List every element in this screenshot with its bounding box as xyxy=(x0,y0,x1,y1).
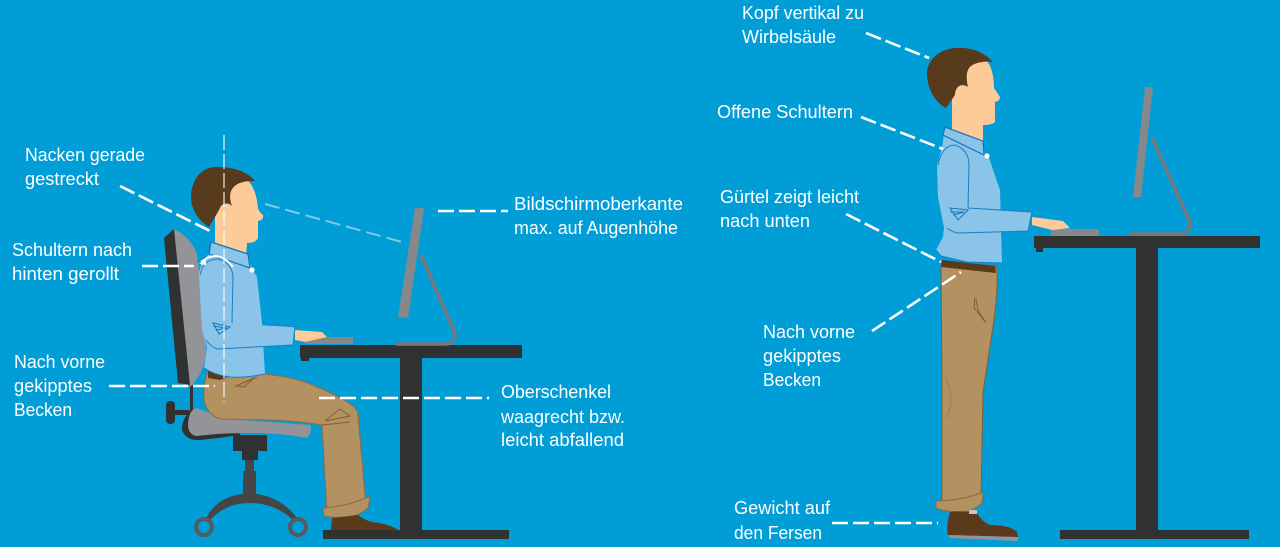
callout: Bildschirmoberkante: Bildschirmoberkante xyxy=(514,193,683,214)
callout: Nach vorne gekipptes Becken (seated): Nach vorne xyxy=(14,351,105,372)
callout: Gewicht auf den Fersen: den Fersen xyxy=(734,522,822,543)
callout: Bildschirmoberkante: max. auf Augenhöhe xyxy=(514,217,678,238)
monitor: seated xyxy=(396,208,455,344)
callout: Nacken gerade gestreckt xyxy=(25,144,214,233)
desk: seated xyxy=(300,345,522,539)
monitor: standing xyxy=(1130,87,1190,234)
callout: Offene Schultern xyxy=(717,101,943,149)
callout: Kopf vertikal zu Wirbelsäule: Kopf vertikal zu xyxy=(742,2,864,23)
callout: Gewicht auf den Fersen xyxy=(734,497,938,543)
callout: Schultern nach hinten gerollt xyxy=(12,239,194,284)
callout: Nach vorne gekipptes Becken (standing): Nach vorne xyxy=(763,321,855,342)
keyboard: seated xyxy=(305,337,353,344)
callout: Gürtel zeigt leicht nach unten xyxy=(720,186,941,262)
callout: Bildschirmoberkante xyxy=(438,193,683,238)
callout: Oberschenkel xyxy=(319,381,625,450)
callout: Nach vorne gekipptes Becken (standing) xyxy=(763,272,961,390)
callout: Offene Schultern: Offene Schultern xyxy=(717,101,853,122)
desk: standing xyxy=(1034,236,1260,539)
person: standing xyxy=(927,48,1070,541)
guide: eye line to screen top xyxy=(265,204,402,242)
callout: Nach vorne gekipptes Becken (seated) xyxy=(14,351,215,420)
callout: Gürtel zeigt leicht nach unten: Gürtel zeigt leicht xyxy=(720,186,859,207)
illustration: standing desk xyxy=(927,48,1260,541)
callout: Oberschenkel: leicht abfallend xyxy=(501,429,624,450)
callout: Nach vorne gekipptes Becken (standing): gekipptes xyxy=(763,345,841,366)
callout: Nacken gerade gestreckt: gestreckt xyxy=(25,168,99,189)
callout: Nach vorne gekipptes Becken (standing): Becken xyxy=(763,369,821,390)
callout: Nacken gerade gestreckt: Nacken gerade xyxy=(25,144,145,165)
person: seated xyxy=(191,167,398,530)
callout: Nach vorne gekipptes Becken (seated): gekipptes xyxy=(14,375,92,396)
icon: shoulder roll arrow xyxy=(199,256,255,273)
callout: Nach vorne gekipptes Becken (seated): Becken xyxy=(14,399,72,420)
callout: Oberschenkel: waagrecht bzw. xyxy=(500,406,625,427)
illustration: seated desk xyxy=(164,167,522,539)
callout: Schultern nach hinten gerollt: hinten gerollt xyxy=(12,263,119,284)
callout: Gürtel zeigt leicht nach unten: nach unten xyxy=(720,210,810,231)
callout: Schultern nach hinten gerollt: Schultern nach xyxy=(12,239,132,260)
guide: vertical spine line xyxy=(223,135,225,402)
callout: Oberschenkel: Oberschenkel xyxy=(501,381,611,402)
callout: Gewicht auf den Fersen: Gewicht auf xyxy=(734,497,831,518)
office chair xyxy=(164,229,311,535)
callout: Kopf vertikal zu Wirbelsäule: Wirbelsäule xyxy=(742,26,836,47)
callout: Kopf vertikal zu Wirbelsäule xyxy=(742,2,929,58)
keyboard: standing xyxy=(1051,229,1099,236)
